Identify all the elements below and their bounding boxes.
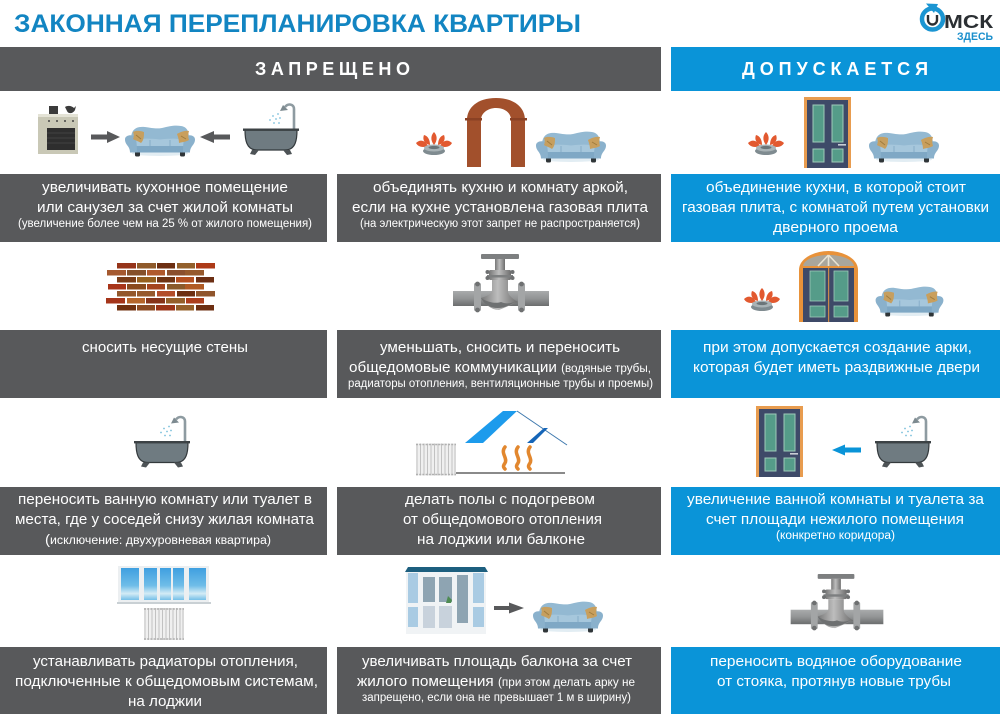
icon: brick wall <box>106 263 215 310</box>
panel: forbidden header: ЗАПРЕЩЕНО <box>255 59 410 79</box>
panel: moving bathroom <box>0 487 327 555</box>
icon: door <box>756 406 803 477</box>
panel: arch with gas stove: если на кухне установлена газовая плита <box>352 199 649 216</box>
icon: bath <box>875 417 931 468</box>
panel: arch with gas stove <box>337 174 661 242</box>
panel: moving bathroom: переносить ванную комнату или туалет в <box>18 491 312 508</box>
logo: Омск Здесь: МСК <box>944 11 994 32</box>
icon: heat waves <box>503 447 531 469</box>
icon: arched door <box>799 251 858 322</box>
panel: door opening allowed: дверного проема <box>773 219 899 236</box>
icon group: balcony, arrow and sofa <box>405 567 603 634</box>
icon: balcony <box>405 567 488 634</box>
panel: door opening allowed: объединение кухни, в которой стоит <box>706 179 966 196</box>
panel: arch with gas stove: объединять кухню и комнату аркой, <box>373 179 628 196</box>
icon: sofa <box>869 132 939 162</box>
panel: enlarge balcony: запрещено, если она не превышает 1 м в ширину) <box>362 692 631 704</box>
title: ЗАКОННАЯ ПЕРЕПЛАНИРОВКА КВАРТИРЫ <box>14 10 581 38</box>
icon group: stove, bath and sofa <box>38 105 299 156</box>
panel: load-bearing walls: сносить несущие стены <box>82 339 248 356</box>
panel: moving bathroom: (исключение: двухуровневая квартира) <box>45 531 271 547</box>
arrow: blue left <box>832 444 861 456</box>
panel: moving water equipment <box>671 647 1000 714</box>
icon: sofa <box>125 126 195 156</box>
icon: gas burner <box>748 132 784 155</box>
icon: valve <box>453 254 549 312</box>
panel: enlarge bathroom allowed: счет площади нежилого помещения <box>706 511 964 528</box>
panel: sliding doors arch: которая будет иметь раздвижные двери <box>693 359 980 376</box>
panel: arch with gas stove: (на электрическую этот запрет не распространяется) <box>360 218 640 230</box>
panel: door opening allowed: газовая плита, с комнатой путем установки <box>682 199 989 216</box>
icon group: flame, door and sofa <box>748 97 939 168</box>
panel: sliding doors arch: при этом допускается создание арки, <box>703 339 972 356</box>
panel: enlarge bathroom allowed: увеличение ванной комнаты и туалета за <box>687 491 985 508</box>
panel: enlarge kitchen: (увеличение более чем на 25 % от жилого помещения) <box>18 218 312 230</box>
panel: moving water equipment: переносить водяное оборудование <box>710 653 962 670</box>
icon: gas burner <box>744 288 780 311</box>
panel: enlarge balcony <box>337 647 661 714</box>
panel: radiators on loggia: устанавливать радиаторы отопления, <box>33 653 298 670</box>
panel: load-bearing walls <box>0 330 327 398</box>
panel: door opening allowed <box>671 174 1000 242</box>
icon group: flame, arched door and sofa <box>744 251 943 322</box>
icon: sofa <box>876 287 943 317</box>
icon: brick arch <box>465 98 527 167</box>
panel: enlarge kitchen: или санузел за счет жилой комнаты <box>37 199 293 216</box>
panel: radiators on loggia <box>0 647 327 714</box>
icon: bath <box>134 417 190 468</box>
icon: bath <box>243 105 299 155</box>
panel: moving water equipment: от стояка, протянув новые трубы <box>717 673 951 690</box>
panel: sliding doors arch <box>671 330 1000 398</box>
arrow: right <box>494 602 524 614</box>
panel: enlarge kitchen <box>0 174 327 242</box>
panel: enlarge balcony: увеличивать площадь балкона за счет <box>362 653 632 670</box>
icon: house roof <box>465 411 567 445</box>
logo: Омск Здесь: ЗДЕСЬ <box>957 31 993 43</box>
icon: stove <box>38 106 78 154</box>
panel: communications: уменьшать, сносить и переносить <box>380 339 620 356</box>
icon group: loggia window and radiator <box>117 566 211 640</box>
icon: radiator <box>144 608 184 640</box>
panel: allowed header: ДОПУСКАЕТСЯ <box>742 59 928 79</box>
panel: heated floors: делать полы с подогревом <box>405 491 595 508</box>
panel: enlarge bathroom allowed <box>671 487 1000 555</box>
panel: enlarge bathroom allowed: (конкретно коридора) <box>776 530 895 542</box>
panel: enlarge balcony: жилого помещения (при этом делать арку не <box>357 673 635 690</box>
panel: enlarge kitchen: увеличивать кухонное помещение <box>42 179 288 196</box>
panel: allowed header <box>671 47 1000 91</box>
panel: radiators on loggia: на лоджии <box>128 693 202 710</box>
panel: forbidden header <box>0 47 661 91</box>
arrow: left <box>200 131 230 143</box>
panel: communications <box>337 330 661 398</box>
arrow: right <box>91 131 120 143</box>
panel: moving bathroom: места, где у соседей снизу жилая комната <box>15 511 315 528</box>
icon group: door, arrow and bath <box>756 406 931 477</box>
icon: floor line <box>456 472 565 474</box>
panel: heated floors <box>337 487 661 555</box>
panel: radiators on loggia: подключенные к общедомовым системам, <box>15 673 318 690</box>
icon: loggia window <box>117 566 211 604</box>
icon group: radiator, roof, heat waves <box>416 411 567 476</box>
logo: Омск Здесь <box>922 4 994 43</box>
icon: valve <box>791 574 883 630</box>
panel: heated floors: от общедомового отопления <box>403 511 602 528</box>
panel: communications: общедомовые коммуникации (водяные трубы, <box>349 359 651 376</box>
icon: door <box>804 97 851 168</box>
panel: heated floors: на лоджии или балконе <box>417 531 585 548</box>
icon group: flame, arch and sofa <box>416 98 606 167</box>
panel: communications: радиаторы отопления, вентиляционные трубы и проемы) <box>348 378 653 390</box>
icon: gas burner <box>416 132 452 155</box>
icon: sofa <box>536 132 606 162</box>
icon: radiator <box>416 444 456 476</box>
icon: sofa <box>533 602 603 632</box>
